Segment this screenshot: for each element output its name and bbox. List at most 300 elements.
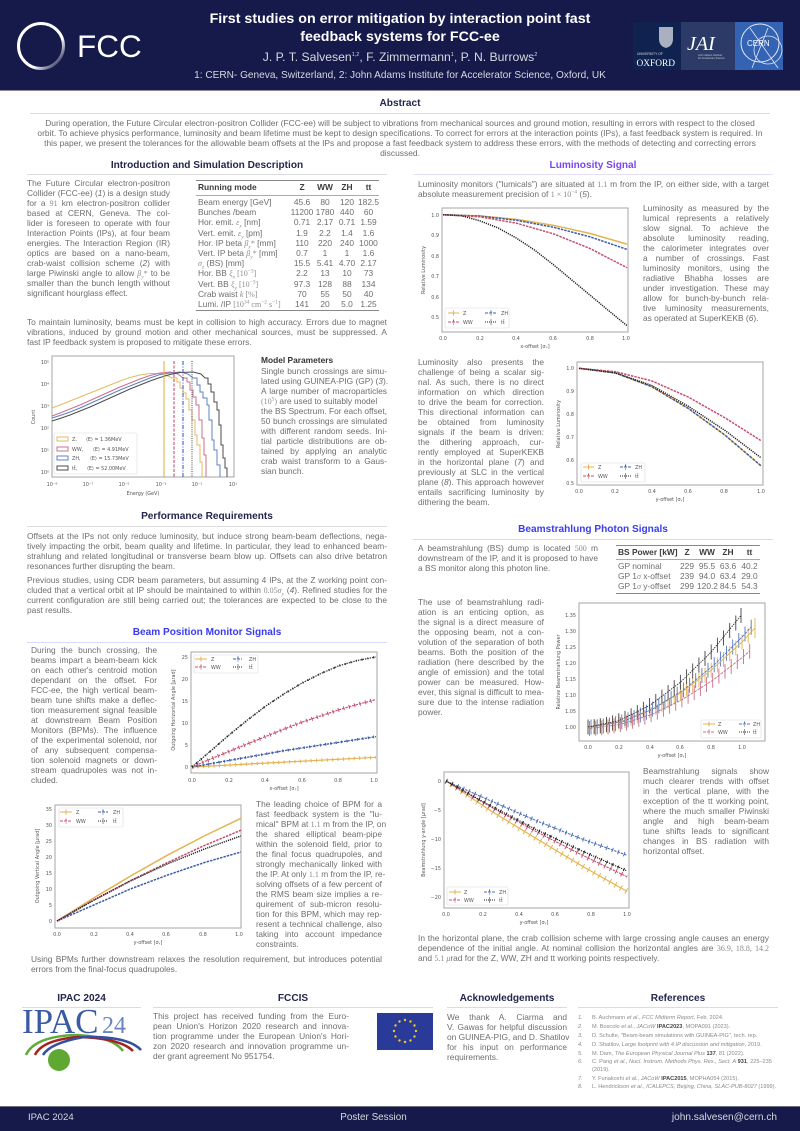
table: BS power: 84.5 — [720, 581, 736, 591]
text: model parameters: with different random seeds. Ini- — [261, 426, 387, 436]
chart: relative luminosity x-offset: 0.6 — [431, 295, 439, 301]
chart: outgoing vertical angle: 5 — [49, 903, 52, 909]
text: BPM bottom: errors from the final-focus quadrupoles. — [31, 964, 177, 974]
text: BS radiation: the opposing beam, not a con- — [418, 627, 544, 637]
chart: relative luminosity y-offset: 1.0 — [566, 366, 574, 372]
chart: beamstrahlung energy spectrum: 10¹ — [229, 482, 237, 488]
chart: relative luminosity x-offset — [421, 208, 630, 350]
intro text — [27, 178, 170, 298]
table: running modes: 1.6 — [363, 248, 374, 258]
text: model parameters: 50 bunch crossings are simulated — [261, 416, 387, 426]
text: BPM left: of the experimental solenoid, nor — [31, 735, 157, 745]
heading: abstract: Abstract — [380, 98, 420, 109]
table: running modes: 60 — [364, 207, 373, 217]
chart: relative luminosity y-offset — [556, 362, 765, 503]
chart: relative luminosity x-offset: 0.2 — [476, 336, 484, 342]
chart: relative luminosity y-offset: 0.6 — [684, 489, 692, 495]
text: luminosity scalar signal: information on which direction — [418, 387, 544, 397]
text: BPM left: tion measurement signal feasible — [31, 705, 157, 715]
table: running modes: 50 — [342, 289, 352, 299]
table: BS power: 239 — [680, 571, 694, 581]
table: running modes: Crab waist k [%] — [198, 289, 257, 299]
text: FCCIS funding — [153, 1011, 349, 1061]
chart: relative luminosity x-offset: 0.5 — [431, 315, 439, 321]
chart: relative beamstrahlung power: 1.15 — [565, 677, 576, 683]
text: acknowledgements: V. Gawas for helpful discussion — [447, 1022, 567, 1032]
text: luminosity right — [643, 203, 769, 323]
table: running modes: 240 — [340, 238, 354, 248]
table: running modes: Bunches /beam — [198, 207, 256, 217]
chart: outgoing vertical angle: ZH — [113, 810, 120, 816]
table: running modes: 73 — [364, 268, 373, 278]
text: references: M. Dam, The European Physical Journal Plus 137, 81 (2022). — [592, 1051, 744, 1057]
icon: EU flag — [377, 1013, 433, 1050]
text: BPM right: solving offsets of a few percent of — [256, 879, 382, 889]
text: FCCIS funding: der grant agreement No 951754. — [153, 1051, 275, 1061]
chart: relative luminosity y-offset: 0.2 — [611, 489, 619, 495]
text: BS radiation: radiation (here described by the — [418, 657, 544, 667]
text: performance requirements: Offsets at the IPs not only reduce luminosity, but induce strong beam-beam deflections, nega- — [27, 531, 387, 541]
text: model parameters: tained by applying an analytic — [261, 446, 387, 456]
chart: beamstrahlung y-angle: −15 — [431, 866, 441, 872]
text: luminosity scalar signal: nal. As such, there is no direct — [418, 377, 544, 387]
text: BPM right: within the solenoid field, prior to — [256, 839, 382, 849]
table: running modes: ZH — [341, 182, 353, 192]
title: First studies on error mitigation by interaction point fast — [210, 11, 590, 27]
icon: IPAC24 logo: 24 — [102, 1013, 126, 1039]
chart: beamstrahlung y-angle: tt̄ — [499, 897, 503, 904]
text: BPM left: During the bunch crossing, the — [31, 645, 157, 655]
intro text: Collider (FCC-ee) (1) is a design study — [27, 188, 170, 198]
table: running modes: 220 — [318, 238, 332, 248]
table: running modes: Hor. BB ξx [10−3] — [198, 268, 256, 281]
intro text: crab-waist collision scheme (2) with — [27, 258, 170, 268]
chart: beamstrahlung energy spectrum: 10² — [41, 426, 49, 432]
text: BS radiation: ation is an enticing option, as — [418, 607, 544, 617]
text: references — [578, 1015, 776, 1090]
chart: outgoing vertical angle: 0.8 — [199, 932, 207, 938]
table: running modes: 40 — [364, 289, 373, 299]
chart: beamstrahlung y-angle — [421, 772, 631, 926]
chart: outgoing horizontal angle: Z — [211, 657, 215, 663]
text: BPM left: of any subsequent compensa- — [31, 745, 157, 755]
chart: outgoing vertical angle: 0.0 — [53, 932, 61, 938]
table: running modes: Running mode — [198, 182, 257, 192]
text: BS horizontal plane: dependence of the initial angle. At nominal collision the horizontal angles are 36.9, 18.8, 14.2 — [418, 943, 769, 953]
text: model parameters: Single bunch crossings are simu- — [261, 366, 387, 376]
text: luminosity scalar signal: rently employed at SuperKEKB — [418, 447, 544, 457]
chart: relative luminosity y-offset: 0.6 — [566, 458, 574, 464]
text: luminosity right: tive luminosity measurements, — [643, 303, 769, 313]
text: BS horizontal plane — [418, 933, 769, 963]
table: running modes: 70 — [297, 289, 307, 299]
abstract text — [37, 118, 763, 158]
footer: email: john.salvesen@cern.ch — [672, 1112, 777, 1123]
chart: beamstrahlung y-angle: 0 — [438, 779, 441, 785]
chart: relative beamstrahlung power — [556, 602, 766, 759]
text: luminosity scalar signal: Luminosity also presents the — [418, 357, 544, 367]
text: BPM right: the shared elliptical beam-pipe — [256, 829, 382, 839]
title — [210, 11, 590, 45]
text: references: C. Pang et al., Nucl. Instrum. Methods Phys. Res., Sect. A 931, 225–235 — [592, 1059, 772, 1065]
intro text: The Future Circular electron-positron — [27, 178, 170, 188]
chart: outgoing horizontal angle: tt̄ — [249, 664, 253, 671]
chart: outgoing horizontal angle: 0 — [185, 765, 188, 771]
table: BS power: 229 — [680, 561, 694, 571]
chart: relative beamstrahlung power: 1.05 — [565, 709, 576, 715]
chart: beamstrahlung energy spectrum: 10⁵ — [41, 360, 49, 366]
heading: beamstrahlung photon signals: Beamstrahlung Photon Signals — [518, 524, 668, 535]
table: running modes: Hor. IP beta βx* [mm] — [198, 238, 276, 250]
text: model parameters: tial particle distributions are ob- — [261, 436, 387, 446]
text: BPM right: resent a technical challenge, also — [256, 919, 382, 929]
table: BS power: 54.3 — [741, 581, 758, 591]
chart: beamstrahlung energy spectrum: tt̄, — [72, 465, 78, 472]
table: running modes: 182.5 — [358, 197, 379, 207]
text: BPM left: tion solenoid magnets or down- — [31, 755, 157, 765]
table: running modes: 2.17 — [360, 258, 377, 268]
text: BPM right: quirement of sub-micron resolu- — [256, 899, 382, 909]
chart: relative beamstrahlung power: 1.35 — [565, 613, 576, 619]
chart: beamstrahlung energy spectrum — [31, 356, 237, 497]
table: running modes: 120 — [340, 197, 354, 207]
chart: relative beamstrahlung power: y-offset [σᵧ] — [658, 753, 686, 759]
table: BS power: 63.6 — [720, 561, 736, 571]
text: BPM right: constraints. — [256, 939, 299, 949]
table: running modes: 2.2 — [296, 268, 308, 278]
intro text: significant hourglass effect. — [27, 288, 128, 298]
chart: outgoing horizontal angle: x-offset [σₓ] — [269, 786, 299, 792]
text: performance requirements: resonances further disrupting the beam. — [27, 561, 175, 571]
text: luminosity right: luminosity monitors, using the — [643, 263, 769, 273]
chart: outgoing horizontal angle: 25 — [182, 655, 188, 661]
text: BS vertical trends: changes in BS radiation with — [643, 836, 769, 846]
chart: beamstrahlung y-angle: 0.8 — [587, 912, 595, 918]
text: luminosity scalar signal: in the horizontal plane (7) and — [418, 457, 544, 467]
intro paragraph 2 — [27, 317, 387, 347]
table: BS power: 63.4 — [720, 571, 736, 581]
heading: references: References — [651, 993, 705, 1004]
text: performance requirements: past results. — [27, 605, 72, 615]
abstract text: this paper, we present the tolerances for the allowable beam offsets at the IPs and propose a fast feedback system to address these errors, with the methods of detecting and correcting errors — [44, 138, 756, 148]
intro paragraph 2: To maintain luminosity, beams must be kept in collision to high accuracy. Errors due to magnet — [27, 317, 387, 327]
text: luminosity scalar signal: be obtained from luminosity — [418, 417, 544, 427]
text: BS vertical trends: angle and high beam-beam — [643, 816, 769, 826]
text: BPM left: at downstream Beam Position — [31, 715, 157, 725]
text: references: 4. — [578, 1042, 583, 1048]
footer: session: Poster Session — [340, 1112, 407, 1123]
heading: introduction: Introduction and Simulation Description — [111, 160, 303, 171]
chart: beamstrahlung energy spectrum: 10⁰ — [41, 470, 49, 476]
text: luminosity right: allow for bunch-by-bunch rela- — [643, 293, 769, 303]
chart: relative beamstrahlung power: Relative Beamstrahlung Power — [556, 634, 562, 709]
text: BPM right: the final focus quadrupoles, and — [256, 849, 382, 859]
chart: outgoing horizontal angle: 0.6 — [298, 778, 306, 784]
chart: relative beamstrahlung power: ZH — [753, 722, 760, 728]
text: model parameters: (105) are used to suitably model — [261, 396, 377, 406]
text: BS radiation — [418, 597, 544, 717]
text: luminosity intro: absolute measurement precision of 1 × 10−4 (5). — [418, 189, 592, 199]
text: BPM left: FCC-ee, the high vertical beam- — [31, 685, 157, 695]
table: running modes: 1 — [323, 248, 327, 258]
intro text: large Piwinski angle to allow βy* to be — [27, 268, 170, 281]
chart: beamstrahlung y-angle: ZH — [499, 890, 506, 896]
intro text: smaller than the bunch length without — [27, 278, 170, 288]
chart: beamstrahlung energy spectrum: Z, — [72, 437, 77, 443]
chart: relative luminosity x-offset: 0.8 — [431, 254, 439, 260]
table: running modes: 110 — [295, 238, 309, 248]
chart: relative luminosity x-offset: 0.6 — [549, 336, 557, 342]
text: acknowledgements: for his input on performance — [447, 1042, 567, 1052]
chart: beamstrahlung energy spectrum: ⟨E⟩ = 15.73MeV — [90, 456, 129, 462]
chart: relative luminosity y-offset: 0.5 — [566, 481, 574, 487]
text: BPM right: The leading choice of BPM for a — [256, 799, 382, 809]
text: BS vertical trends: in the vertical plane, with the — [643, 786, 769, 796]
text: BS radiation: ever, this signal is difficult to mea- — [418, 687, 544, 697]
text: references: 5. — [578, 1051, 583, 1057]
text: references: Y. Funakoshi et al., JACoW IPAC2015, MOPHA054 (2015). — [592, 1076, 739, 1082]
text: performance requirements: Previous studies, using CDR beam parameters, but assuming 4 IPs, at the Z working point con- — [27, 575, 387, 585]
chart: outgoing vertical angle: Outgoing Vertical Angle [μrad] — [35, 829, 41, 903]
chart: beamstrahlung y-angle: Z — [464, 890, 468, 896]
text: FCCIS funding: tion programme under the European Union's Hori- — [153, 1031, 349, 1041]
chart: relative luminosity y-offset: 0.0 — [575, 489, 583, 495]
chart: beamstrahlung energy spectrum: Count — [31, 410, 37, 424]
heading: luminosity signal: Luminosity Signal — [550, 160, 636, 171]
chart: outgoing horizontal angle: 0.2 — [225, 778, 233, 784]
chart: beamstrahlung energy spectrum: WW, — [72, 447, 84, 453]
chart: outgoing vertical angle: 30 — [46, 823, 52, 829]
chart: relative beamstrahlung power: 1.00 — [565, 725, 576, 731]
chart: relative beamstrahlung power: tt̄ — [753, 729, 757, 736]
chart: outgoing horizontal angle — [171, 652, 378, 792]
text: BS radiation: The use of beamstrahlung radi- — [418, 597, 544, 607]
icon: FCC logo: FCC — [77, 28, 142, 64]
chart: relative luminosity x-offset: 1.0 — [622, 336, 630, 342]
intro text: based at CERN, Geneva. The col- — [27, 208, 170, 218]
chart: outgoing vertical angle — [35, 804, 243, 946]
text: BS vertical trends: much clearer trends with offset — [643, 776, 769, 786]
text: beamstrahlung intro: A beamstrahlung (BS) dump is located 500 m — [418, 543, 598, 553]
text: luminosity scalar signal: This directional information can — [418, 407, 544, 417]
chart: beamstrahlung y-angle: y-offset [σᵧ] — [520, 920, 548, 926]
text: BS radiation: angle of emission) and the total — [418, 667, 544, 677]
text: luminosity right: slow signal. To achieve the — [643, 223, 769, 233]
header band — [0, 0, 800, 91]
chart: outgoing vertical angle: 1.0 — [235, 932, 243, 938]
table: running modes: Beam energy [GeV] — [198, 197, 272, 207]
table: running modes: 128 — [318, 279, 332, 289]
text: BS vertical trends: Beamstrahlung signals show — [643, 766, 769, 776]
chart: beamstrahlung y-angle: 1.0 — [623, 912, 631, 918]
chart: outgoing horizontal angle: 0.4 — [261, 778, 269, 784]
chart: beamstrahlung y-angle: 0.2 — [479, 912, 487, 918]
icon: institute logos: OXFORD — [636, 59, 675, 69]
text: luminosity scalar signal: plane (8). This approach however — [418, 477, 544, 487]
intro paragraph 2: fast IP feedback system is proposed to mitigate these errors. — [27, 337, 252, 347]
text: BPM left: Monitors (BPMs). The influence — [31, 725, 157, 735]
chart: beamstrahlung energy spectrum: ⟨E⟩ = 4.91MeV — [93, 447, 129, 453]
table: BS power: GP 1σ y-offset — [618, 581, 671, 591]
text: model parameters — [261, 355, 388, 476]
chart: beamstrahlung energy spectrum: ZH, — [72, 456, 81, 462]
abstract text: discussed. — [380, 148, 420, 158]
text: FCCIS funding: zon 2020 research and innovation programme un- — [153, 1041, 349, 1051]
table: running modes: Vert. emit. εy [pm] — [198, 228, 262, 240]
chart: outgoing vertical angle: 0 — [49, 919, 52, 925]
table: running modes: 88 — [342, 279, 352, 289]
table: running modes: 5.41 — [317, 258, 333, 268]
table: running modes: 11200 — [291, 207, 313, 217]
text: references: B. Auchmann et al., FCC Midterm Report, Feb. 2024. — [592, 1015, 724, 1021]
footer band — [0, 1106, 800, 1131]
chart: relative luminosity y-offset: 0.8 — [566, 412, 574, 418]
text: references: M. Boscolo et al., JACoW IPAC2023, MOPA091 (2023). — [592, 1024, 730, 1030]
table: running modes: 1.9 — [296, 228, 308, 238]
table: BS power — [616, 545, 760, 594]
chart: outgoing horizontal angle: 15 — [182, 699, 188, 705]
table: running modes: tt — [366, 182, 371, 192]
chart: relative beamstrahlung power: WW — [718, 730, 728, 736]
chart: outgoing vertical angle: 0.2 — [90, 932, 98, 938]
table: BS power: BS Power [kW] — [618, 547, 678, 557]
chart: beamstrahlung energy spectrum: 10⁴ — [41, 382, 49, 388]
text: references: (2019). — [592, 1067, 610, 1073]
chart: relative beamstrahlung power: 0.2 — [615, 745, 623, 751]
heading: performance requirements: Performance Requirements — [141, 511, 273, 522]
chart: beamstrahlung y-angle: 0.4 — [515, 912, 523, 918]
text: BPM left: stream quadrupoles was not in- — [31, 765, 157, 775]
table: running modes: 2.2 — [319, 228, 331, 238]
text: BS radiation: power. — [418, 707, 443, 717]
chart: beamstrahlung energy spectrum: 10⁻⁵ — [119, 482, 129, 488]
text: performance requirements: current configuration are still being carried out; the tolerances are expected to be close to the — [27, 595, 387, 605]
table: BS power: tt — [747, 547, 752, 557]
text: luminosity scalar signal: to drive the beam for correction. — [418, 397, 544, 407]
table: BS power: GP 1σ x-offset — [618, 571, 671, 581]
text: luminosity scalar signal: previously at SLC in the vertical — [418, 467, 544, 477]
text: BPM right: the IP. At only 1.1 m from the IP, re- — [256, 869, 385, 879]
table: running modes: 80 — [320, 197, 330, 207]
text: beamstrahlung intro: downstream of the IP, and it is proposed to have — [418, 553, 598, 563]
text: references: 7. — [578, 1076, 583, 1082]
table: running modes: 20 — [320, 299, 330, 309]
title: feedback systems for FCC-ee — [300, 29, 500, 45]
text: BS vertical trends: where the much smaller Piwinski — [643, 806, 769, 816]
text: references: D. Shatilov, Large footprint with 4 IP discussion and mitigation, 2019. — [592, 1042, 762, 1048]
text: acknowledgements — [447, 1012, 570, 1062]
table: running modes: Hor. emit. εx [nm] — [198, 217, 260, 230]
text: model parameters: sian bunch. — [261, 466, 304, 476]
table: running modes: 1.6 — [363, 228, 374, 238]
chart: relative luminosity y-offset: 0.8 — [720, 489, 728, 495]
text: performance requirements: strahlung and related longitudinal or transverse beam blow up. Offsets can also drive betatron — [27, 551, 387, 561]
chart: relative luminosity y-offset: ZH — [635, 465, 642, 471]
chart: beamstrahlung energy spectrum: Energy (GeV) — [127, 491, 159, 497]
chart: outgoing horizontal angle: ZH — [249, 657, 256, 663]
heading: acknowledgements: Acknowledgements — [460, 993, 554, 1004]
chart: beamstrahlung energy spectrum: ⟨E⟩ = 1.36MeV — [86, 437, 122, 443]
footer: conference: IPAC 2024 — [28, 1112, 74, 1123]
chart: relative luminosity y-offset: 0.9 — [566, 389, 574, 395]
chart: relative beamstrahlung power: 1.0 — [738, 745, 746, 751]
text: model parameters: A large number of macroparticles — [261, 386, 387, 396]
text: BS radiation: power can be measured. How- — [418, 677, 544, 687]
table: BS power: GP nominal — [618, 561, 662, 571]
chart: beamstrahlung energy spectrum: ⟨E⟩ = 52.00MeV — [87, 466, 126, 472]
abstract text: orbit. To achieve physics performance, luminosity and beam lifetime must be kept to design specifications. To correct for errors at the interaction points (IPs), a fast feedback system is required. In — [37, 128, 763, 138]
text: BPM bottom — [31, 954, 382, 974]
table: running modes: σz (BS) [mm] — [198, 258, 244, 271]
table: running modes: 55 — [320, 289, 330, 299]
chart: relative luminosity x-offset: Relative Luminosity — [421, 246, 427, 294]
text: luminosity scalar signal: the dithering approach, cur- — [418, 437, 544, 447]
chart: relative beamstrahlung power: 0.0 — [584, 745, 592, 751]
chart: outgoing horizontal angle: 0.8 — [334, 778, 342, 784]
chart: relative luminosity x-offset: 0.9 — [431, 233, 439, 239]
text: BS radiation: sure due to the intense radiation — [418, 697, 544, 707]
table: running modes: Vert. IP beta βy* [mm] — [198, 248, 278, 261]
icon: institute logos: JAI — [687, 33, 716, 55]
chart: outgoing vertical angle: 0.6 — [162, 932, 170, 938]
chart: beamstrahlung y-angle: 0.0 — [442, 912, 450, 918]
table: BS power: Z — [684, 547, 690, 557]
chart: outgoing vertical angle: 0.4 — [126, 932, 134, 938]
text: luminosity right: the calorimeter integrates over — [643, 243, 769, 253]
chart: outgoing horizontal angle: 20 — [182, 677, 188, 683]
icon: institute logos: UNIVERSITY OF — [637, 52, 663, 56]
table: running modes: Z — [299, 182, 305, 192]
text: acknowledgements: on GUINEA-PIG, and D. Shatilov — [447, 1032, 569, 1042]
chart: outgoing vertical angle: 10 — [46, 887, 52, 893]
table: BS power: ZH — [722, 547, 734, 557]
text: references: 2. — [578, 1024, 583, 1030]
text: luminosity right: Luminosity as measured by the — [643, 203, 769, 213]
text: luminosity scalar signal — [418, 357, 544, 507]
chart: relative beamstrahlung power: 1.20 — [565, 661, 576, 667]
table: running modes: WW — [317, 182, 333, 192]
chart: outgoing vertical angle: 15 — [46, 871, 52, 877]
text: performance requirements: cluded that a vertical orbit at IP should be maintained to within 0.05σy (4). Refined studies for the — [27, 585, 387, 598]
chart: outgoing horizontal angle: 10 — [182, 721, 188, 727]
intro paragraph 2: vibrations, induced by ground motion and other mechanical sources, must be suppressed. A — [27, 327, 387, 337]
text: BS horizontal plane: In the horizontal plane, the crab collision scheme with large crossing angle causes an energy — [418, 933, 769, 943]
table: running modes — [196, 180, 379, 311]
text: BS horizontal plane: and 5.1 μrad for the Z, WW, ZH and tt working points respectively. — [418, 953, 659, 963]
text: BPM right: mical" BPM at 1.1 m from the IP, on — [256, 819, 386, 829]
intro text: energies. The Interaction Region (IR) — [27, 238, 170, 248]
text: acknowledgements: We thank A. Ciarma and — [447, 1012, 567, 1022]
text: FCCIS funding: This project has received funding from the Euro- — [153, 1011, 349, 1021]
table: running modes: 1780 — [316, 207, 334, 217]
text: beamstrahlung intro — [418, 543, 598, 573]
table: running modes: Vert. BB ξy [10−3] — [198, 279, 258, 291]
chart: relative beamstrahlung power: 0.4 — [646, 745, 654, 751]
table: running modes: 1000 — [359, 238, 378, 248]
table: running modes: 15.5 — [294, 258, 310, 268]
text: luminosity intro: Luminosity monitors ("lumicals") are situated at 1.1 m from the IP, on either side, with a target — [418, 179, 769, 189]
text: luminosity scalar signal: signals if the beam is driven: — [418, 427, 544, 437]
intro text: for a 91 km electron-positron collider — [27, 198, 170, 208]
text: BS radiation: volution of the separation of both — [418, 637, 544, 647]
chart: relative beamstrahlung power: 0.6 — [676, 745, 684, 751]
text: BPM right: tion for this BPM, which may rep- — [256, 909, 382, 919]
text: acknowledgements: requirements. — [447, 1052, 498, 1062]
chart: relative luminosity x-offset: 0.8 — [586, 336, 594, 342]
text: BPM right: taking into account impedance — [256, 929, 382, 939]
text: model parameters: Model Parameters — [261, 355, 333, 365]
table: running modes: 10 — [342, 268, 352, 278]
